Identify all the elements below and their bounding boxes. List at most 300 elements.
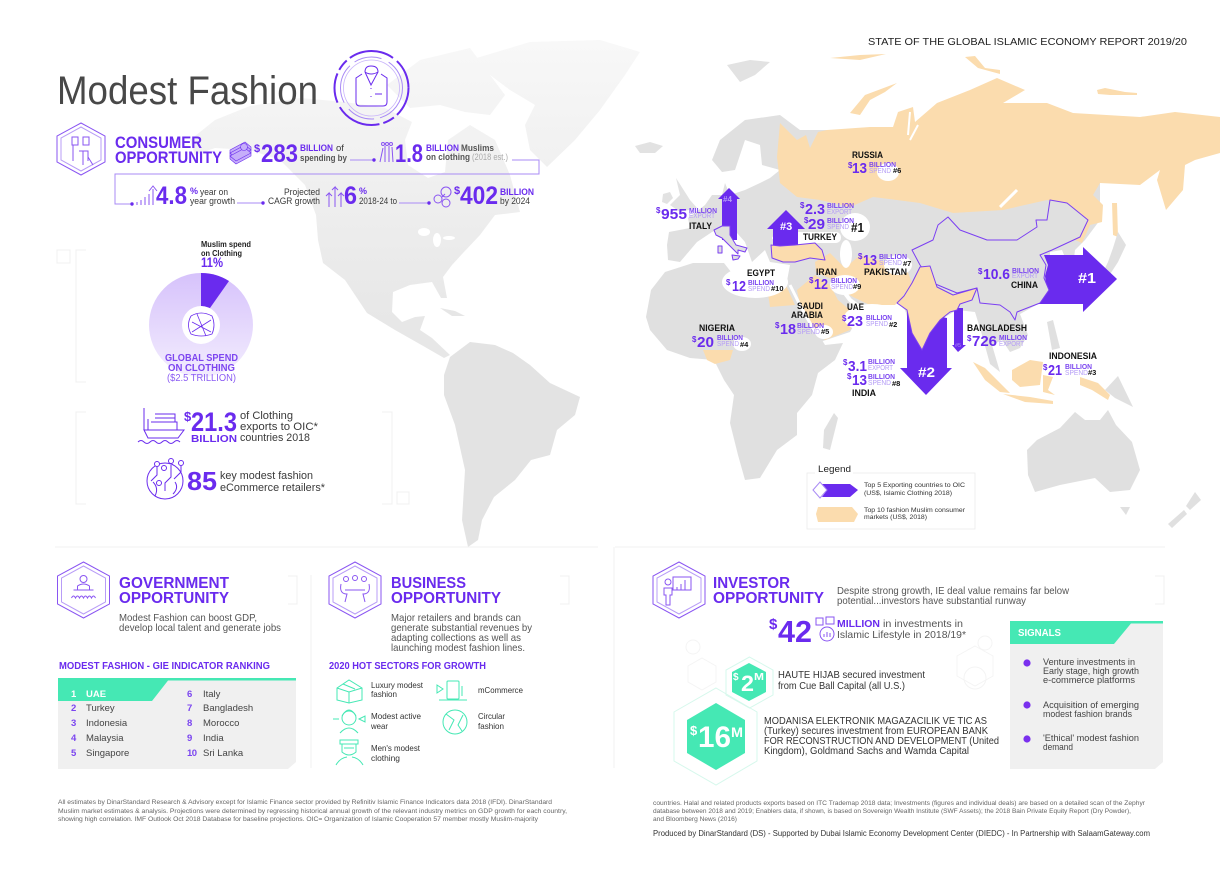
map: Iceland, UK, Svalbard <box>635 60 770 212</box>
sector: mCommerce: mCommerce <box>478 685 523 695</box>
heading: consumer opportunity <box>115 133 223 167</box>
label: Saudi Arabia: SPEND <box>797 329 820 336</box>
map: South America <box>444 342 580 547</box>
title: Modest Fashion <box>57 69 318 113</box>
ranking column 1: 5 <box>71 748 77 759</box>
label: Indonesia: SPEND <box>1065 370 1088 377</box>
map: Eurasia base <box>667 115 1100 372</box>
ranking column 1: Indonesia <box>86 718 128 729</box>
panel: global spend <box>57 239 253 384</box>
label: Iran <box>809 267 861 293</box>
label: China: EXPORT <box>1012 273 1039 280</box>
icon: rising arrows <box>326 187 344 207</box>
label: Pakistan: 13 <box>863 252 877 269</box>
stat: CAGR label: Projected <box>284 187 320 198</box>
stat: 21.3 billion: countries 2018 <box>240 432 310 444</box>
outline: Italy <box>714 226 747 260</box>
label: Italy <box>656 206 717 231</box>
export arrow: China #1: #1 <box>1078 270 1096 287</box>
label: Egypt: $ <box>726 278 731 287</box>
map: Black Sea and Caspian <box>772 232 852 268</box>
panel: government opportunity <box>58 562 297 769</box>
label: China: $ <box>978 267 983 276</box>
label: India: BILLION <box>868 374 895 381</box>
ranking column 1 <box>71 689 129 759</box>
label: Turkey: 29 <box>808 216 825 233</box>
label: UAE: SPEND <box>866 321 888 328</box>
footnote: left: showing high correlation. IMF Outlook Oct 2018 Database for baseline projections. OIC= Organization of Islamic Cooperation 57 member mostly Muslim-majority <box>58 816 539 823</box>
stat: 283 billion: 283 <box>261 140 298 168</box>
pie chart <box>149 273 253 377</box>
icon: money stack <box>230 142 251 164</box>
text: government body: Modest Fashion can boost GDP, <box>119 612 257 624</box>
signal: ethical <box>1043 733 1139 753</box>
text: investor body: Despite strong growth, IE deal value remains far below <box>837 585 1069 597</box>
label: Nigeria <box>692 323 749 351</box>
stat: 85 retailers: 85 <box>187 466 217 496</box>
signal: ethical: 'Ethical' modest fashion <box>1043 733 1139 744</box>
map: label halos <box>722 163 912 351</box>
map: Africa <box>646 263 843 480</box>
label: Russia: #6 <box>893 166 901 175</box>
stat: 6 percent: 2018-24 to <box>359 196 397 207</box>
footnote: left: All estimates by DinarStandard Research & Advisory except for Islamic Finance sector provided by Refinitiv Islamic Finance Indicators data 2018 (IFDI). DinarStandard <box>58 799 552 806</box>
label: Turkey: SPEND <box>827 224 849 231</box>
label: Indonesia: INDONESIA <box>1049 351 1097 361</box>
stat: 1.8 billion: (2018 est.) <box>472 152 508 163</box>
label: India <box>843 358 900 398</box>
label: Nigeria: $ <box>692 335 697 344</box>
stat: 21.3 billion: of Clothing <box>240 410 293 422</box>
stat: 1.8 billion: on clothing <box>426 152 470 163</box>
label: India: BILLION <box>868 359 895 366</box>
text: Haute Hijab deal: from Cue Ball Capital (all U.S.) <box>778 680 905 692</box>
label: Nigeria: NIGERIA <box>699 323 735 333</box>
label: India: INDIA <box>852 388 876 398</box>
stat: CAGR label <box>268 187 320 207</box>
stat: 42 million: $ <box>769 616 778 633</box>
map: Greenland and Canadian islands <box>387 40 640 167</box>
ranking column 2 <box>187 689 253 759</box>
stat: 21.3 billion: $ <box>184 409 192 424</box>
icon: consumer hexagon <box>57 123 105 175</box>
stat: 6 percent <box>344 182 397 210</box>
text: business body: launching modest fashion lines. <box>391 642 525 654</box>
stat: 1.8 billion: BILLION <box>426 143 459 154</box>
heading: government opportunity: OPPORTUNITY <box>119 590 229 607</box>
label: Bangladesh: EXPORT <box>999 341 1025 348</box>
label: Iran: IRAN <box>816 267 837 277</box>
label: Iran: SPEND <box>831 284 853 291</box>
connector lines <box>115 160 539 204</box>
stat: 402 billion <box>454 182 534 210</box>
export arrow: Bangladesh #5: #5 <box>955 343 961 349</box>
text: Modanisa deal: MODANISA ELEKTRONIK MAGAZACILIK VE TIC AS <box>764 715 987 727</box>
label: Iran: #9 <box>853 282 861 291</box>
stat: 4.8 percent: % <box>190 186 198 196</box>
text: business body: generate substantial revenues by <box>391 622 533 634</box>
pie label: global spend: GLOBAL SPEND <box>165 352 238 364</box>
icon: network globe <box>147 458 184 499</box>
stat: 21.3 billion: BILLION <box>191 433 237 445</box>
label: Saudi Arabia: $ <box>775 321 780 330</box>
heading: investor opportunity: OPPORTUNITY <box>713 590 824 607</box>
signal bullets <box>1023 659 1031 743</box>
heading: GIE indicator ranking: MODEST FASHION - GIE INDICATOR RANKING <box>59 661 270 672</box>
sector: men's modest clothing: clothing <box>371 753 400 763</box>
icon: coins <box>434 187 451 207</box>
footnote: right: and Bloomberg News (2016) <box>653 816 737 823</box>
label: Turkey: $ <box>804 216 809 225</box>
heading: business opportunity <box>391 575 501 607</box>
stat: 4.8 percent: year growth <box>190 196 235 207</box>
label: Russia: 13 <box>852 160 867 177</box>
stat: 4.8 percent: year on <box>200 187 228 198</box>
label: Turkey: EXPORT <box>827 209 853 216</box>
report header: STATE OF THE GLOBAL ISLAMIC ECONOMY REPORT 2019/20 <box>868 36 1187 48</box>
map: country outlines <box>714 200 1088 350</box>
text: business body: Major retailers and brands can <box>391 612 521 624</box>
heading: business opportunity: OPPORTUNITY <box>391 590 501 607</box>
map: Baikal and Ob inlets <box>908 112 1017 207</box>
label: Egypt: EGYPT <box>747 268 775 278</box>
footnote: right <box>653 800 1146 823</box>
footnote: right: database between 2018 and 2019; Enablers data, if shown, is based on Sovereign Wealth Institute (SWF Assets); the 2018 Bain Private Equity Report (Dry Powder), <box>653 808 1131 815</box>
text: business body: adapting collections as well as <box>391 632 521 644</box>
label: India: #8 <box>892 379 900 388</box>
footnote: left <box>58 799 567 823</box>
export arrow: Italy #4: #4 <box>723 195 732 204</box>
label: Turkey: 2.3 <box>805 201 825 218</box>
stat: 42 million: 42 <box>778 614 812 649</box>
label: Indonesia: BILLION <box>1065 364 1092 371</box>
sector: mCommerce <box>437 681 523 700</box>
label: Turkey: BILLION <box>827 203 854 210</box>
legend: Top 5 Exporting countries to OIC <box>864 482 965 489</box>
text: Modanisa deal: (Turkey) secures investment from EUROPEAN BANK <box>764 725 988 737</box>
label: Russia <box>848 150 901 177</box>
label: Pakistan: #7 <box>903 259 911 268</box>
signal: acquisition: modest fashion brands <box>1043 709 1132 720</box>
text: investor body: potential...investors have substantial runway <box>837 595 1027 607</box>
heading: government opportunity <box>119 575 229 607</box>
label: UAE: 23 <box>847 313 863 330</box>
map: Australia and New Zealand <box>1027 410 1201 528</box>
label: Italy: MILLION <box>689 208 717 215</box>
label: China: 10.6 <box>983 266 1010 283</box>
label: Bangladesh: BANGLADESH <box>967 323 1027 333</box>
section dividers <box>55 547 1165 768</box>
decorative box <box>57 250 70 263</box>
ranking column 1: 3 <box>71 718 76 729</box>
export arrow: India #2 <box>900 310 952 395</box>
stat: 42 million: Islamic Lifestyle in 2018/19* <box>837 629 966 641</box>
icon: investor hexagon <box>653 562 705 618</box>
label: Russia: $ <box>848 161 853 170</box>
label: Iran: 12 <box>814 276 828 293</box>
label: Egypt: 12 <box>732 278 746 295</box>
icon: growth chart <box>137 186 157 205</box>
label: Saudi Arabia <box>775 301 829 338</box>
ranking column 2: 7 <box>187 703 192 714</box>
label: Pakistan: BILLION <box>879 254 907 261</box>
map: Russia <box>777 78 1220 243</box>
label: Italy: $ <box>656 206 661 215</box>
signal: venture investments <box>1043 657 1139 686</box>
signal: ethical: demand <box>1043 742 1073 753</box>
hexagon: 2M deal: $ <box>733 672 739 683</box>
text: Modanisa deal <box>764 715 999 757</box>
stat: CAGR label: CAGR growth <box>268 196 320 207</box>
label: Pakistan: $ <box>858 252 863 261</box>
legend: markets (US$, 2018) <box>864 514 927 521</box>
map: North America <box>190 98 520 358</box>
label: Egypt: SPEND <box>748 286 770 293</box>
stat: 21.3 billion <box>184 407 319 445</box>
label: Pakistan: SPEND <box>879 260 902 267</box>
ranking column 1: 4 <box>71 733 77 744</box>
label: UAE: #2 <box>889 320 897 329</box>
label: Bangladesh: 726 <box>972 333 997 350</box>
label: UAE: $ <box>842 314 847 323</box>
label: Egypt <box>726 268 784 295</box>
label: Nigeria: SPEND <box>717 341 739 348</box>
stat: 21.3 billion: exports to OIC* <box>240 421 319 433</box>
text: business body <box>391 612 533 654</box>
label: Iran: $ <box>809 276 814 285</box>
panel: signals: SIGNALS <box>1018 627 1061 639</box>
label: Turkey: #1 <box>851 220 864 235</box>
label: Italy: EXPORT <box>689 213 716 220</box>
label: UAE: BILLION <box>866 315 892 322</box>
footnote: right: countries. Halal and related products exports based on ITC Trademap 2018 data; Investments (figures and individual deals) are based on a detailed scan of the Zephyr <box>653 800 1146 807</box>
stat: 402 billion: by 2024 <box>500 196 530 207</box>
label: UAE <box>842 302 897 330</box>
heading: consumer opportunity: OPPORTUNITY <box>115 148 223 167</box>
connector dots <box>130 158 431 206</box>
hexagon: 16M deal: M <box>731 724 743 740</box>
stat: 85 retailers: key modest fashion <box>220 470 313 482</box>
heading: consumer opportunity: CONSUMER <box>115 133 202 152</box>
icon: lifestyle investment <box>816 617 834 641</box>
legend: market swatch <box>816 507 858 522</box>
stat: 283 billion: $ <box>254 143 260 155</box>
label: India: EXPORT <box>868 365 894 372</box>
label: Saudi Arabia: SAUDI <box>797 301 823 311</box>
label: Russia: RUSSIA <box>852 150 883 160</box>
ranking column 1: Singapore <box>86 748 129 759</box>
ranking column 2: Italy <box>203 689 221 700</box>
label: China <box>978 266 1039 290</box>
label: Turkey: TURKEY <box>803 232 837 242</box>
outline: Turkey <box>771 243 825 262</box>
pie label: Muslim spend <box>201 239 251 270</box>
stat: 4.8 percent <box>156 182 235 210</box>
heading: business opportunity: BUSINESS <box>391 575 466 592</box>
ranking table <box>58 678 296 769</box>
stat: 6 percent: % <box>359 186 367 196</box>
ranking column 2: India <box>203 733 224 744</box>
icon: government hexagon <box>58 562 110 618</box>
map: Middle East markets <box>767 253 912 340</box>
legend: Top 10 fashion Muslim consumer <box>864 507 966 514</box>
ranking column 2: 6 <box>187 689 192 700</box>
stat: 283 billion: BILLION <box>300 143 333 154</box>
icon: globe knot <box>188 313 214 336</box>
label: Nigeria: #4 <box>740 340 749 349</box>
heading: investor opportunity <box>713 575 824 607</box>
text: Haute Hijab deal <box>778 669 925 692</box>
panel: exports and retailers <box>76 407 409 504</box>
label: Saudi Arabia: ARABIA <box>791 310 823 320</box>
footnote: left: Muslim market estimates & analysis. Projections were determined by regressing historical annual growth of the relevant industry metrics on GDP growth for each country, <box>58 808 567 815</box>
ranking column 2: Bangladesh <box>203 703 253 714</box>
map: Philippines, Indochina islands <box>1047 320 1133 407</box>
stat: 402 billion: BILLION <box>500 187 534 198</box>
label: China: CHINA <box>1011 280 1038 290</box>
legend: (US$, Islamic Clothing 2018) <box>864 490 952 497</box>
text: Modanisa deal: Kingdom), Goldmand Sachs and Wamda Capital <box>764 745 969 757</box>
sector: circular fashion <box>443 710 505 734</box>
legend <box>807 463 975 529</box>
export arrow: Italy #4 <box>718 188 740 240</box>
label: China: BILLION <box>1012 268 1039 275</box>
decorative hexagons <box>686 636 993 690</box>
sector: modest active wear: wear <box>370 721 388 731</box>
pie label: Muslim spend: 11% <box>201 254 223 270</box>
outline: India <box>897 266 977 350</box>
stat: 1.8 billion <box>395 140 508 168</box>
hexagon: 16M deal <box>674 688 757 785</box>
sector: circular fashion: Circular <box>478 711 505 721</box>
ranking column 1: Malaysia <box>86 733 124 744</box>
map: Madagascar <box>823 413 838 450</box>
ranking column 1: 2 <box>71 703 76 714</box>
ranking column 1: UAE <box>86 689 106 700</box>
pie label: Muslim spend: Muslim spend <box>201 239 251 249</box>
text: Modanisa deal: FOR RECONSTRUCTION AND DEVELOPMENT (United <box>764 735 999 747</box>
label: UAE: UAE <box>847 302 864 312</box>
label: Nigeria: 20 <box>697 334 714 351</box>
label: Pakistan: PAKISTAN <box>864 267 907 277</box>
hexagon: 16M deal: $ <box>690 723 698 738</box>
label: Russia: SPEND <box>869 168 891 175</box>
stat: 6 percent: 6 <box>344 182 357 210</box>
map: Caribbean <box>440 308 465 316</box>
sector: luxury modest fashion: Luxury modest <box>371 680 424 690</box>
stat: 4.8 percent: 4.8 <box>156 182 187 210</box>
ranking column 2: Sri Lanka <box>203 748 244 759</box>
label: India: 3.1 <box>848 358 867 375</box>
label: India: $ <box>843 358 848 367</box>
ranking column 2: 8 <box>187 718 192 729</box>
ranking column 1: Turkey <box>86 703 115 714</box>
label: Egypt: BILLION <box>748 280 774 287</box>
panel: consumer opportunity <box>57 123 539 210</box>
hexagon: 2M deal <box>726 657 773 708</box>
stat: 21.3 billion: 21.3 <box>191 407 237 437</box>
sector: luxury modest fashion: fashion <box>371 689 397 699</box>
stat: 1.8 billion: Muslims <box>461 143 494 154</box>
stat: 283 billion: of <box>336 143 344 154</box>
stat: 85 retailers: eCommerce retailers* <box>220 482 326 494</box>
label: India: SPEND <box>868 380 891 387</box>
map: Gulf and Red Sea <box>790 280 858 332</box>
text: Haute Hijab deal: HAUTE HIJAB secured investment <box>778 669 925 681</box>
label: Indonesia: $ <box>1043 363 1048 372</box>
legend: export arrow swatch <box>813 482 858 498</box>
label: Turkey <box>800 201 864 242</box>
map: Indonesia <box>973 360 1110 404</box>
stat: 402 billion: $ <box>454 185 460 197</box>
ranking column 2: Morocco <box>203 718 239 729</box>
heading: government opportunity: GOVERNMENT <box>119 575 229 592</box>
text: government body: develop local talent and generate jobs <box>119 622 281 634</box>
heading: investor opportunity: INVESTOR <box>713 575 790 592</box>
label: Iran: BILLION <box>831 278 857 285</box>
export arrow: Turkey #3 <box>767 210 805 248</box>
hexagon: 2M deal: 2 <box>741 671 754 696</box>
panel: investor opportunity <box>653 562 1164 785</box>
text: investor body <box>837 585 1069 607</box>
stat: 42 million <box>769 614 966 649</box>
hexagon: 2M deal: M <box>754 672 764 683</box>
signal: acquisition <box>1043 700 1139 720</box>
map: Japan <box>1098 232 1126 283</box>
stat: 42 million: MILLION <box>837 618 880 630</box>
ranking column 2: 10 <box>187 748 197 759</box>
signal: venture investments: Venture investments in <box>1043 657 1135 668</box>
label: India: 13 <box>852 372 867 389</box>
stat: 283 billion <box>254 140 348 168</box>
map: Nigeria market <box>703 350 733 364</box>
sector: men's modest clothing <box>336 740 421 765</box>
outline: China <box>912 200 1088 320</box>
label: Saudi Arabia: #5 <box>821 327 829 336</box>
label: Bangladesh: MILLION <box>999 335 1027 342</box>
label: Pakistan <box>858 252 911 277</box>
label: Indonesia: #3 <box>1088 368 1096 377</box>
export arrow: China #1 <box>1038 247 1117 312</box>
pie label: global spend: ON CLOTHING <box>168 362 235 374</box>
map: Russian arctic islands and Sakhalin <box>830 54 1137 237</box>
label: Bangladesh: $ <box>967 334 972 343</box>
stat: 1.8 billion: 1.8 <box>395 140 423 168</box>
label: Italy: ITALY <box>689 221 712 231</box>
label: Italy: 955 <box>661 206 687 223</box>
stat: 402 billion: 402 <box>460 182 498 210</box>
world map <box>190 40 1220 547</box>
label: India: $ <box>847 372 852 381</box>
export arrow: Turkey #3: #3 <box>780 221 792 233</box>
label: Saudi Arabia: 18 <box>780 321 796 338</box>
ranking column 2: 9 <box>187 733 192 744</box>
map: Great Lakes <box>418 228 455 247</box>
export arrow: India #2: #2 <box>918 364 935 380</box>
label: Russia: BILLION <box>869 162 896 169</box>
sector: circular fashion: fashion <box>478 721 504 731</box>
sector: luxury modest fashion <box>337 680 424 703</box>
production credit: Produced by DinarStandard (DS) - Supported by Dubai Islamic Economy Development Center (DIEDC) - In Partnership with SalaamGateway.com <box>653 829 1150 838</box>
label: Saudi Arabia: BILLION <box>797 323 824 330</box>
icon: business hexagon <box>329 562 381 618</box>
decorative box <box>397 492 409 504</box>
export arrow: Bangladesh #5 <box>952 308 966 352</box>
label: Egypt: #10 <box>771 284 784 293</box>
pie label: global spend: ($2.5 TRILLION) <box>167 372 236 384</box>
hexagon: 16M deal: 16 <box>698 721 731 754</box>
label: Indonesia <box>1043 351 1097 379</box>
